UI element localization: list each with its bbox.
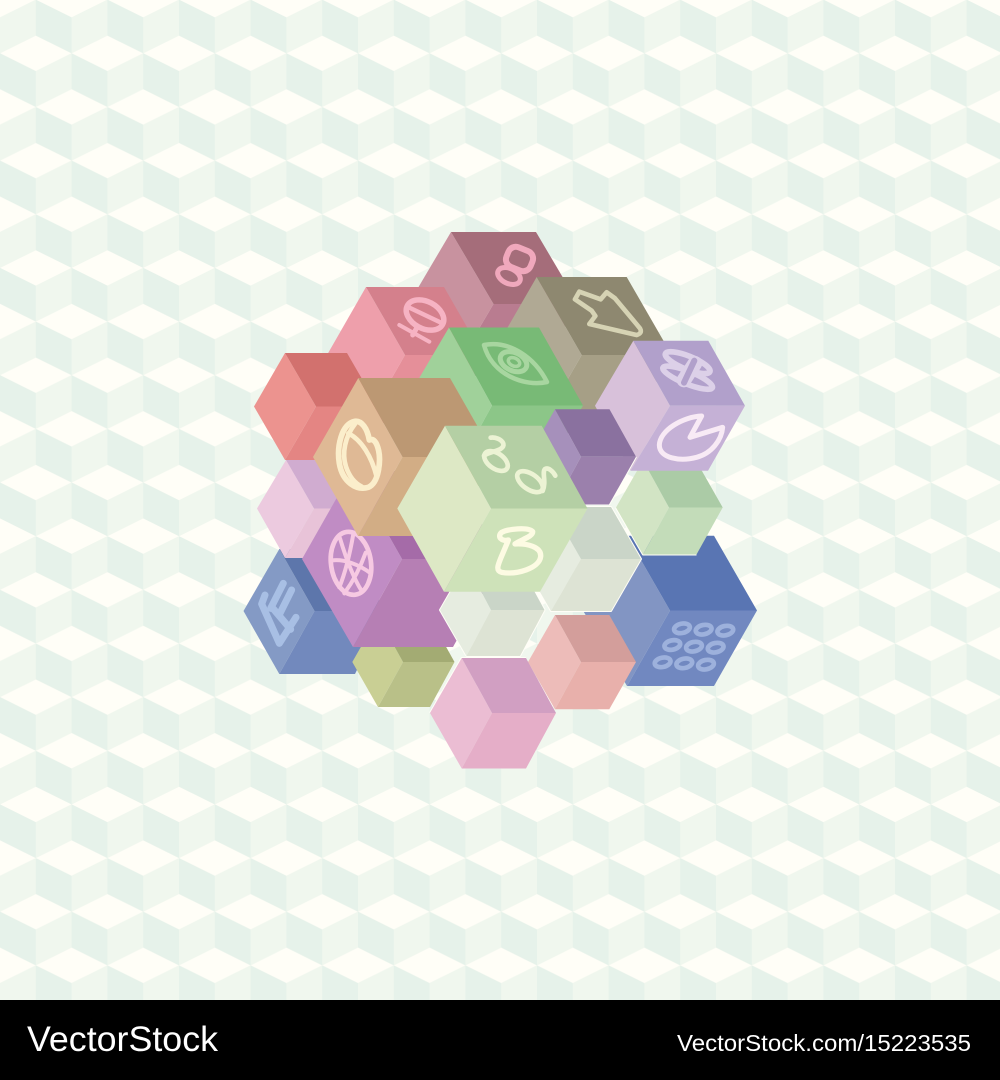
cube: blue with hand icon <box>244 549 386 674</box>
icon: linked script loops <box>481 438 555 496</box>
image reference url: VectorStock.com/15223535 <box>677 1030 971 1056</box>
cube: red <box>254 353 378 460</box>
icon: script letter <box>498 529 541 573</box>
cube: pale grey right <box>521 507 641 611</box>
cube: pale grey lower <box>440 564 544 656</box>
icon: capsule knot <box>661 347 715 394</box>
cube: small green <box>616 460 723 554</box>
cube: olive <box>352 617 454 707</box>
cube: orchid with ball icon <box>302 471 502 647</box>
cube: maroon with rings icon <box>408 232 578 376</box>
cube cluster <box>244 232 757 768</box>
cube: light pink <box>257 460 371 558</box>
cube: rose bottom <box>430 658 556 768</box>
icon: eye <box>484 344 547 383</box>
footer bar <box>0 1000 1000 1080</box>
icon: nine rings <box>654 622 734 671</box>
cube: light purple with capsule and pie icons <box>595 341 745 471</box>
cube: tan with shell icon <box>313 378 495 536</box>
cube: big blue with dots icon <box>583 536 757 686</box>
icon: rounded square and oval <box>495 244 535 288</box>
cube: taupe with arrow icon <box>492 277 672 433</box>
icon: ball <box>327 529 375 597</box>
brand wordmark: VectorStock <box>27 1020 219 1059</box>
icon: pie chart <box>659 416 723 459</box>
cube: dark purple <box>528 409 636 504</box>
icon: shell <box>339 421 379 488</box>
icon: hand <box>262 583 296 643</box>
cube: big light green with script icons <box>397 426 588 592</box>
icon: arrow <box>575 292 641 335</box>
cube: green with eye icon <box>403 328 583 484</box>
cube: salmon <box>528 615 636 709</box>
icon: oval with stem <box>399 294 449 342</box>
cube: pink with oval icon <box>327 287 483 423</box>
